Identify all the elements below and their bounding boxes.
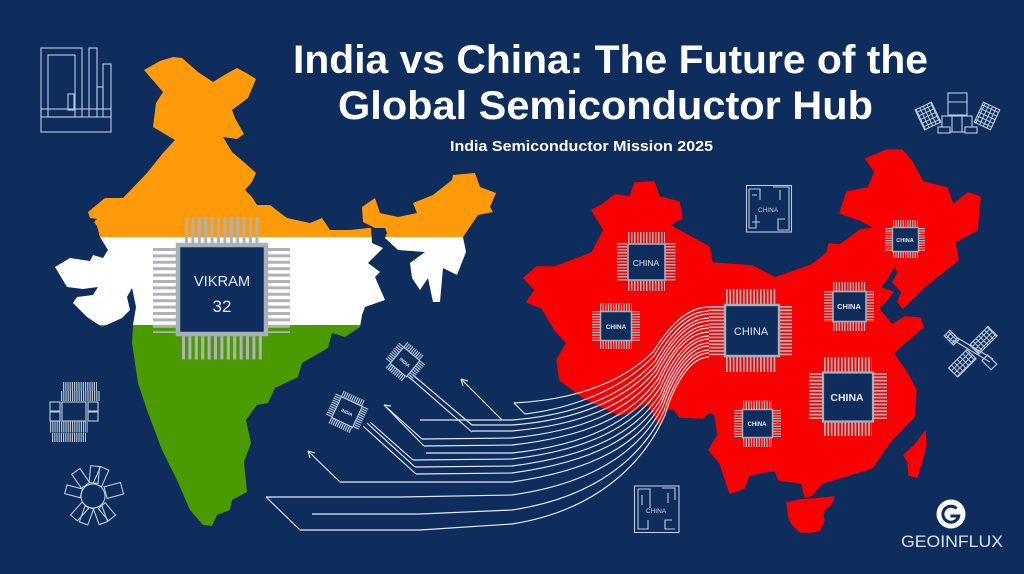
icon: outlined building blocks top left (41, 48, 111, 132)
chip: China east (828, 286, 870, 326)
icon: small rotated chip upper (385, 342, 425, 382)
chip: Vikram 32: 32 (213, 297, 231, 316)
chip: China south: CHINA (748, 422, 767, 428)
title: Global Semiconductor Hub (338, 84, 873, 128)
icon: outlined chip upper centre (746, 186, 792, 232)
arrow diagonals (461, 379, 502, 420)
icon: satellite top right (915, 93, 1000, 133)
chip: China east: CHINA (837, 302, 861, 311)
chip: China north-east (888, 224, 922, 255)
chip: China centre: CHINA (734, 326, 769, 338)
chip: Vikram 32: VIKRAM (194, 274, 250, 290)
chip: China north-east: CHINA (896, 238, 914, 244)
chip: China west: CHINA (606, 324, 627, 331)
Taiwan island (904, 432, 926, 477)
chip: China west (596, 307, 636, 345)
icon: outlined chip upper centre: CHINA (758, 207, 779, 214)
chip: China south-east large (816, 364, 880, 429)
chip: China north-west (622, 238, 670, 286)
icon: satellite right (944, 327, 997, 377)
icon: chip cluster left (50, 386, 100, 438)
title (293, 38, 928, 128)
chip: China north-west: CHINA (633, 258, 660, 268)
subtitle: India Semiconductor Mission 2025 (450, 138, 713, 155)
logo: Geoinflux (901, 500, 1003, 551)
logo: Geoinflux: GEOINFLUX (901, 533, 1003, 551)
icon: outlined chip lower centre: CHINA (646, 508, 667, 515)
Hainan island (787, 497, 834, 532)
chip: Vikram 32 (164, 230, 279, 347)
China map (524, 150, 980, 532)
icon: small rotated chip upper: INDIA (398, 357, 412, 369)
chip: China south (738, 405, 777, 442)
icon: solar fan bottom left (65, 466, 124, 525)
chip: China south-east large: CHINA (830, 392, 864, 404)
India map in tricolour (40, 50, 510, 535)
icon: outlined chip lower centre (634, 486, 679, 532)
title: India vs China: The Future of the (293, 38, 928, 82)
chip: China centre (716, 296, 786, 364)
icon: small rotated chip lower (327, 392, 367, 432)
circuit lines from China to India (266, 307, 709, 530)
icon: small rotated chip lower: INDIA (340, 408, 354, 418)
